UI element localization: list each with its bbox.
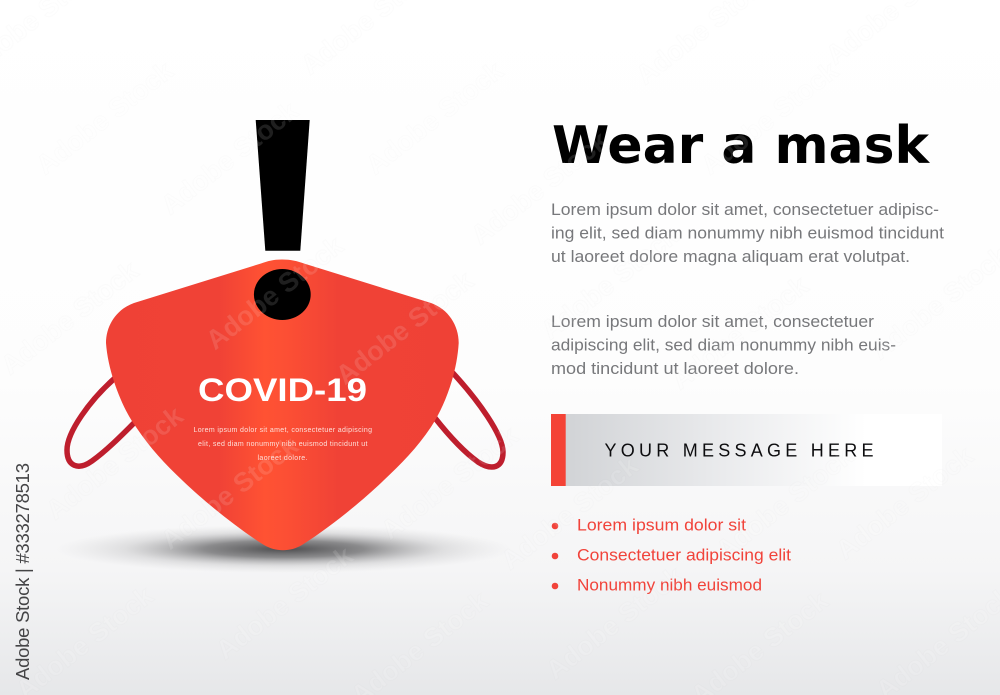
mask heading: COVID-19 xyxy=(198,372,367,408)
watermarks: Adobe Stock xyxy=(465,125,614,251)
left ear loop xyxy=(67,378,135,466)
watermarks: Adobe Stock xyxy=(695,55,844,181)
watermarks: Adobe Stock xyxy=(375,420,524,546)
ground shadow xyxy=(56,525,512,573)
watermarks: Adobe Stock xyxy=(495,450,644,576)
bullet two: Consectetuer adipiscing elit xyxy=(577,546,791,564)
paragraph two: mod tincidunt ut laoreet dolore. xyxy=(551,360,799,378)
paragraph two: Lorem ipsum dolor sit amet, consectetuer xyxy=(551,313,875,331)
mask body xyxy=(106,260,459,550)
watermarks: Adobe Stock xyxy=(540,560,689,686)
paragraph one: Lorem ipsum dolor sit amet, consectetuer adipisc- xyxy=(551,201,939,219)
bullet three: Nonummy nibh euismod xyxy=(577,576,762,594)
paragraph one: ing elit, sed diam nonummy nibh euismod tincidunt xyxy=(551,224,944,242)
watermarks: Adobe Stock xyxy=(830,440,979,566)
mask small text: elit, sed diam nonummy nibh euismod tincidunt ut xyxy=(198,441,368,448)
exclamation dot xyxy=(254,269,311,320)
watermarks: Adobe Stock xyxy=(40,400,189,526)
watermarks: Adobe Stock xyxy=(665,270,814,396)
watermarks: Adobe Stock xyxy=(210,540,359,666)
exclamation mark xyxy=(254,120,311,320)
watermarks: Adobe Stock xyxy=(155,430,304,556)
mask illustration xyxy=(67,120,503,550)
paragraph two: adipiscing elit, sed diam nonummy nibh euis- xyxy=(551,336,896,354)
mask small text xyxy=(194,427,372,462)
watermarks: Adobe Stock xyxy=(535,220,684,346)
paragraph one: ut laoreet dolore magna aliquam erat volutpat. xyxy=(551,248,910,266)
watermarks: Adobe Stock xyxy=(360,55,509,181)
stock credit: Adobe Stock | #333278513 xyxy=(12,463,33,680)
banner red accent xyxy=(551,414,566,486)
mask small text: laoreet dolore. xyxy=(258,455,308,462)
title: Wear a mask xyxy=(552,116,930,176)
watermarks: Adobe Stock xyxy=(710,440,859,566)
watermarks: Adobe Stock xyxy=(330,265,479,391)
mask small text: Lorem ipsum dolor sit amet, consectetuer adipiscing xyxy=(194,427,372,434)
right ear loop xyxy=(435,372,503,467)
paragraph two xyxy=(551,313,896,378)
watermarks: Adobe Stock xyxy=(155,95,304,221)
banner text: YOUR MESSAGE HERE xyxy=(604,440,874,460)
exclamation bar xyxy=(256,120,310,251)
watermarks: Adobe Stock xyxy=(30,55,179,181)
bullet list xyxy=(552,516,791,594)
paragraph one xyxy=(551,201,944,266)
watermarks: Adobe Stock xyxy=(200,230,349,356)
banner gradient panel xyxy=(565,414,942,486)
bullet one: Lorem ipsum dolor sit xyxy=(577,516,746,534)
message banner xyxy=(551,414,942,486)
